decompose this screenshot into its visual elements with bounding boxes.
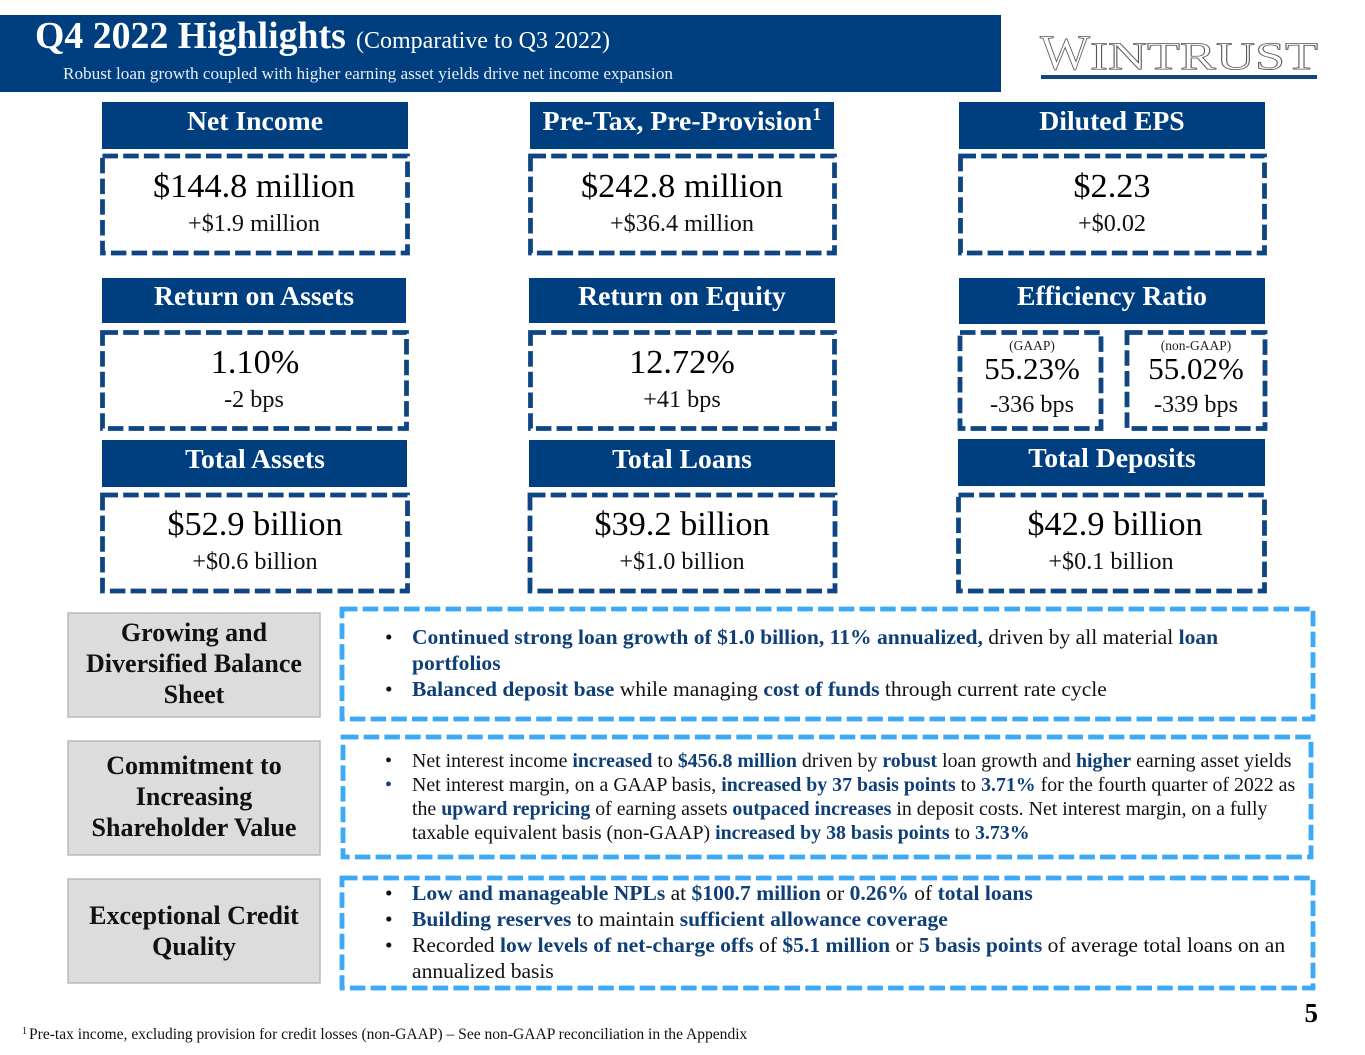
panel: credit quality bullets: •	[385, 881, 393, 905]
panel: total loans: $39.2 billion	[594, 505, 770, 543]
panel: return on equity: 12.72%	[629, 343, 735, 381]
panel: pre-tax, pre-provision: 1	[812, 104, 821, 124]
panel: total deposits	[958, 439, 1265, 591]
panel: diluted EPS: +$0.02	[1078, 210, 1146, 237]
logo: Wintrust: INTRUST	[1090, 35, 1318, 78]
panel: total loans: Total Loans	[612, 443, 752, 474]
panel: pre-tax, pre-provision	[530, 102, 834, 253]
panel: total assets: $52.9 billion	[167, 505, 343, 543]
title: (Comparative to Q3 2022)	[356, 28, 610, 54]
panel: shareholder value bullets: taxable equivalent basis (non-GAAP) increased by 38 basis points to 3.73%	[412, 822, 1030, 844]
label: exceptional credit quality: Exceptional Credit	[89, 901, 299, 930]
panel: return on equity	[529, 278, 835, 428]
panel: credit quality bullets: annualized basis	[412, 959, 554, 983]
non-GAAP value: -339 bps	[1154, 391, 1238, 418]
label: growing and diversified balance sheet: Sheet	[164, 680, 225, 709]
label: commitment to increasing shareholder value: Shareholder Value	[92, 813, 296, 842]
panel: credit quality bullets: Building reserves to maintain sufficient allowance coverage	[412, 907, 948, 931]
GAAP value: 55.23%	[984, 351, 1080, 386]
panel: return on assets: 1.10%	[211, 343, 299, 381]
panel: return on equity: Return on Equity	[578, 280, 786, 311]
panel: total loans: +$1.0 billion	[619, 548, 745, 575]
title: Q4 2022 Highlights	[35, 15, 346, 57]
label: growing and diversified balance sheet	[68, 613, 320, 717]
panel: diluted EPS: Diluted EPS	[1039, 105, 1185, 136]
panel: efficiency ratio: Efficiency Ratio	[1017, 280, 1207, 311]
panel: credit quality bullets: •	[385, 907, 393, 931]
panel: total assets: Total Assets	[185, 443, 325, 474]
footnote: Pre-tax income, excluding provision for credit losses (non-GAAP) – See non-GAAP reconciliation in the Appendix	[29, 1026, 748, 1043]
panel: shareholder value bullets: the upward repricing of earning assets outpaced increases in deposit costs. Net interest margin, on a fully	[412, 798, 1267, 820]
non-GAAP value: 55.02%	[1148, 351, 1244, 386]
panel: shareholder value bullets	[343, 737, 1311, 857]
label: growing and diversified balance sheet: Growing and	[121, 618, 268, 647]
panel: diluted EPS: $2.23	[1073, 167, 1151, 205]
panel: shareholder value bullets: •	[385, 774, 392, 796]
panel: credit quality bullets: Recorded low levels of net-charge offs of $5.1 million or 5 basis points of average total loans on an	[412, 933, 1285, 957]
panel: return on assets	[102, 278, 406, 428]
panel: total deposits: +$0.1 billion	[1048, 548, 1174, 575]
panel: return on equity: +41 bps	[643, 386, 721, 413]
panel: net income: +$1.9 million	[188, 210, 320, 237]
panel: efficiency ratio	[959, 278, 1265, 428]
panel: credit quality bullets: Low and manageable NPLs at $100.7 million or 0.26% of total loans	[412, 881, 1033, 905]
panel: total assets: +$0.6 billion	[192, 548, 318, 575]
panel: shareholder value bullets: Net interest income increased to $456.8 million driven by robust loan growth and higher earning asset yields	[412, 750, 1291, 772]
footnote: 1	[22, 1026, 27, 1037]
subtitle: Robust loan growth coupled with higher earning asset yields drive net income expansion	[63, 64, 673, 83]
panel: pre-tax, pre-provision: +$36.4 million	[610, 210, 754, 237]
label: growing and diversified balance sheet: Diversified Balance	[86, 649, 302, 678]
label: exceptional credit quality	[68, 879, 320, 983]
title banner	[0, 15, 1001, 92]
logo: Wintrust: W	[1040, 24, 1091, 80]
non-GAAP value: (non-GAAP)	[1161, 338, 1231, 353]
GAAP value	[960, 332, 1101, 428]
label: commitment to increasing shareholder value: Commitment to	[106, 751, 282, 780]
panel: balance sheet bullets: Continued strong loan growth of $1.0 billion, 11% annualized, driven by all material loan	[412, 625, 1218, 649]
GAAP value: -336 bps	[990, 391, 1074, 418]
label: commitment to increasing shareholder value	[68, 741, 320, 855]
panel: diluted EPS	[959, 102, 1265, 253]
panel: balance sheet bullets: Balanced deposit base while managing cost of funds through current rate cycle	[412, 677, 1107, 701]
panel: shareholder value bullets: Net interest margin, on a GAAP basis, increased by 37 basis points to 3.71% for the fourth quarter of 2022 as	[412, 774, 1295, 796]
panel: net income	[102, 102, 408, 253]
panel: total deposits: $42.9 billion	[1027, 505, 1203, 543]
panel: total loans	[529, 440, 835, 591]
panel: credit quality bullets	[342, 878, 1313, 988]
panel: net income: Net Income	[187, 105, 323, 136]
panel: shareholder value bullets: •	[385, 750, 392, 772]
panel: balance sheet bullets: •	[385, 625, 393, 649]
logo: Wintrust	[1040, 24, 1318, 80]
page number: 5	[1304, 998, 1318, 1028]
panel: net income: $144.8 million	[153, 167, 355, 205]
label: exceptional credit quality: Quality	[152, 932, 236, 961]
panel: return on assets: -2 bps	[224, 386, 284, 413]
panel: balance sheet bullets: •	[385, 677, 393, 701]
panel: balance sheet bullets: portfolios	[412, 651, 501, 675]
GAAP value: (GAAP)	[1009, 338, 1055, 353]
label: commitment to increasing shareholder value: Increasing	[136, 782, 252, 811]
panel: total deposits: Total Deposits	[1028, 442, 1196, 473]
panel: credit quality bullets: •	[385, 933, 393, 957]
non-GAAP value	[1127, 332, 1265, 428]
panel: balance sheet bullets	[342, 609, 1313, 719]
panel: pre-tax, pre-provision: Pre-Tax, Pre-Provision	[543, 105, 812, 136]
panel: return on assets: Return on Assets	[154, 280, 354, 311]
panel: pre-tax, pre-provision: $242.8 million	[581, 167, 783, 205]
panel: total assets	[102, 440, 408, 591]
